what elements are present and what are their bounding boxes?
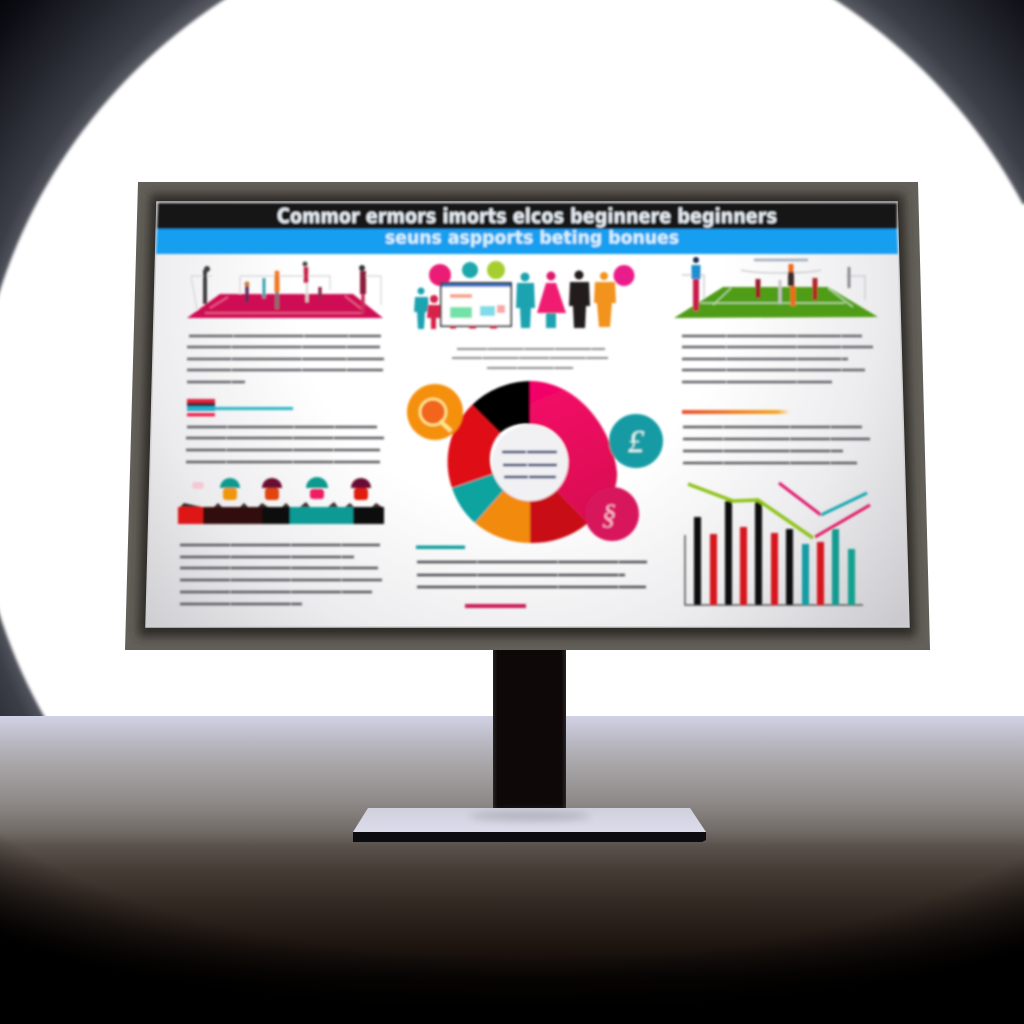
text block: left middle	[186, 427, 384, 462]
section rule: right orange	[682, 410, 790, 414]
person: teal	[516, 272, 535, 328]
person: orange	[594, 272, 616, 327]
icon: orange magnifier badge	[407, 384, 463, 440]
person: black	[569, 270, 590, 328]
section rule: centre pink	[465, 604, 526, 608]
text block: left bottom	[180, 545, 382, 604]
donut chart	[448, 381, 617, 543]
person: pink dress	[537, 272, 566, 328]
icon: magenta currency badge: §	[602, 500, 616, 531]
screen	[146, 202, 909, 627]
axes	[685, 535, 863, 605]
tablet	[441, 283, 511, 327]
subtitle: seuns aspports beting bonues	[385, 228, 679, 248]
infographic content	[156, 203, 898, 608]
header bands	[156, 203, 898, 254]
illustration: green sports field	[674, 257, 878, 318]
text block: right top	[682, 336, 873, 382]
illustration: red sports court	[187, 262, 383, 318]
desk surface	[0, 716, 1024, 1024]
icon: teal currency badge: £	[628, 423, 645, 459]
section rule: centre teal	[416, 546, 465, 549]
monitor stand base	[353, 808, 706, 842]
row of five people	[178, 477, 384, 524]
shoulders	[180, 502, 382, 507]
title: Commor ermors imorts elcos beginnere beginners	[277, 204, 777, 228]
text block: centre top	[452, 349, 608, 368]
player figures	[693, 257, 849, 311]
icon: lime badge	[487, 261, 505, 279]
bar and line chart	[685, 483, 870, 605]
icon: magenta currency badge	[585, 487, 639, 541]
monitor stand neck	[493, 648, 566, 811]
person heads	[192, 477, 371, 500]
donut centre label	[492, 425, 568, 501]
monitor bezel	[125, 182, 930, 650]
bars	[694, 501, 855, 605]
section rule: left	[187, 399, 293, 416]
player figures	[204, 262, 365, 314]
illustration: people around a tablet	[414, 261, 634, 329]
text block: right middle	[683, 427, 870, 463]
trend line: teal	[821, 493, 867, 515]
icon: magenta badge	[614, 265, 634, 286]
icon: teal currency badge	[609, 414, 663, 468]
person: teal left	[414, 288, 429, 329]
trend line: pink rising	[815, 505, 870, 537]
text block: left top	[187, 336, 384, 382]
trend line: pink falling	[779, 483, 821, 515]
trend line: green	[688, 484, 813, 538]
icon: pink badge	[429, 264, 451, 286]
icon: teal badge	[462, 262, 478, 278]
person: small pink	[427, 295, 441, 329]
text block: centre bottom	[417, 562, 647, 587]
